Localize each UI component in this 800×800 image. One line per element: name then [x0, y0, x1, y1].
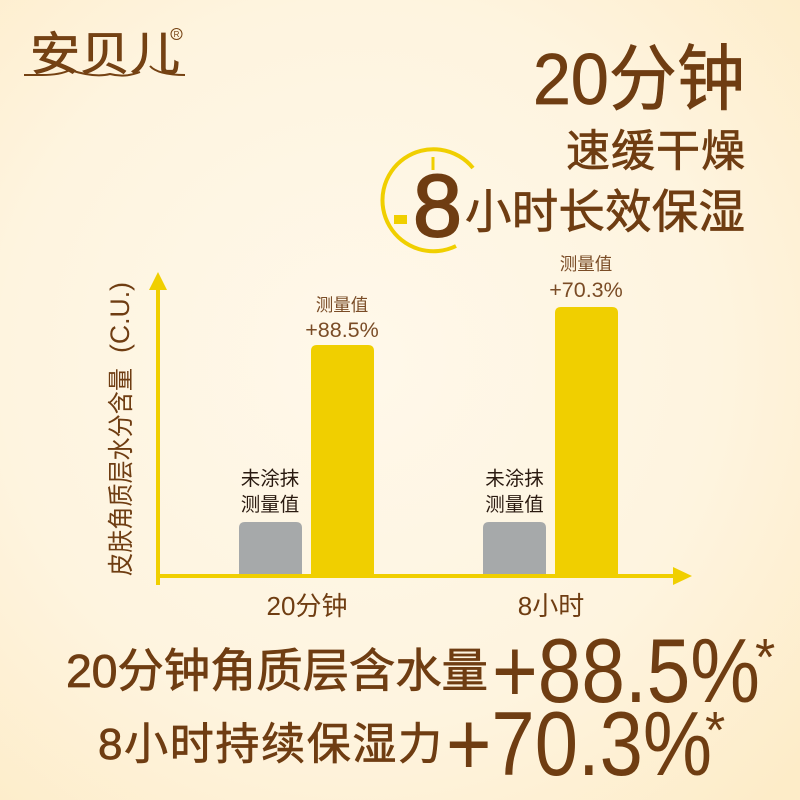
label: 未涂抹测量值 left: 未涂抹 [241, 468, 299, 490]
stat line: 8小时持续保湿力 +70.3%: 8小时持续保湿力 [98, 720, 442, 769]
label: 未涂抹测量值 right [485, 468, 544, 516]
y-axis label: 皮肤角质层水分含量 [106, 368, 136, 576]
stat line: 20分钟角质层含水量 +88.5%: * [755, 629, 775, 687]
subheading: 速缓干燥: 速缓干燥 [566, 127, 745, 176]
stat line: 20分钟角质层含水量 +88.5%: 20分钟角质层含水量 [66, 645, 488, 697]
stat line: 20分钟角质层含水量 +88.5% [66, 621, 775, 722]
stat line: 20分钟角质层含水量 +88.5%: +88.5% [492, 621, 760, 722]
x-axis label: 8小时: 8小时 [518, 591, 584, 621]
label: 测量值 +70.3%: +70.3% [549, 278, 623, 302]
bar chart [105, 254, 692, 621]
bar: 8小时 measured [555, 307, 618, 574]
label: 测量值 +88.5%: +88.5% [305, 318, 379, 342]
headline: 8小时长效保湿: 8 [413, 156, 462, 255]
headline: 8小时长效保湿: 小时长效保湿 [465, 186, 745, 238]
y-axis arrow [149, 272, 167, 585]
bar: 20分钟 untreated [239, 522, 302, 574]
stat line: 8小时持续保湿力 +70.3%: * [705, 702, 725, 760]
label: 未涂抹测量值 right: 未涂抹 [485, 468, 544, 490]
bar: 8小时 untreated [483, 522, 546, 574]
logo: 安贝儿: 安贝儿 [30, 28, 180, 80]
headline: 20分钟: 20分钟 [533, 40, 745, 120]
label: 测量值 +88.5%: 测量值 [316, 295, 368, 315]
label: 未涂抹测量值 left: 测量值 [241, 494, 299, 516]
bar: 20分钟 measured [311, 345, 374, 574]
label: 未涂抹测量值 right: 测量值 [485, 494, 544, 516]
y-axis label: (C.U.) [105, 282, 135, 353]
label: 未涂抹测量值 left [241, 468, 299, 516]
label: 测量值 +70.3% [549, 254, 623, 302]
x-axis arrow [158, 567, 692, 585]
clock icon [382, 149, 473, 251]
headline: 8小时长效保湿 [413, 156, 745, 255]
x-axis label: 20分钟: 20分钟 [267, 591, 347, 621]
stat line: 8小时持续保湿力 +70.3%: +70.3% [446, 694, 712, 795]
label: 测量值 +70.3%: 测量值 [560, 254, 612, 274]
stat line: 8小时持续保湿力 +70.3% [98, 694, 725, 795]
logo: 安贝儿: R [174, 30, 180, 39]
label: 测量值 +88.5% [305, 295, 379, 342]
